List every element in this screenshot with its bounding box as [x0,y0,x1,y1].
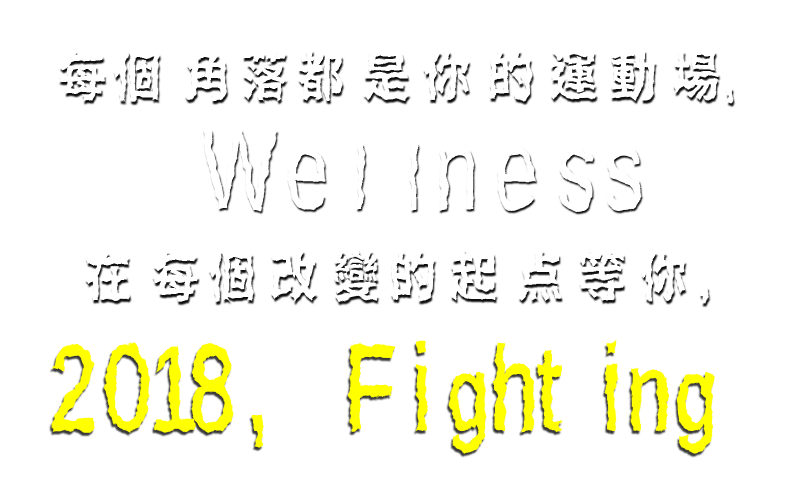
heading: Wellness: We llness [202,106,643,234]
heading: line three: 在每個改變的起点等你, [84,248,711,307]
slogan: 2018, Fighting: 2018, Fighting [49,322,716,456]
heading: line one: 每個角落都是你的運動場, [58,48,736,107]
